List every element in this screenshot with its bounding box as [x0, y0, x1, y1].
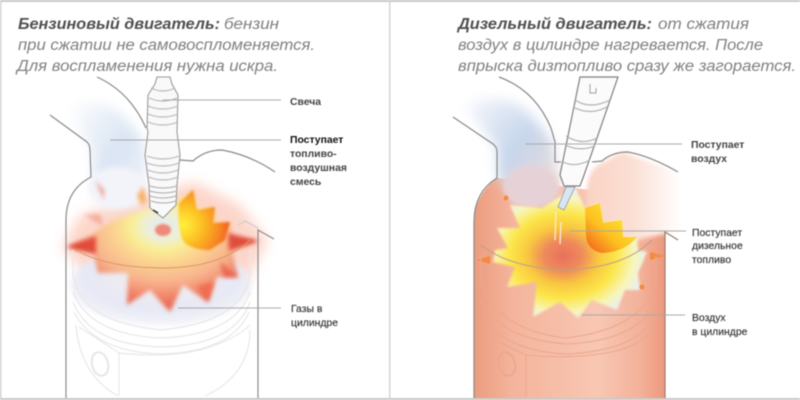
heading: diesel engine description: воздух в цилиндре нагревается. После [458, 37, 763, 54]
outer flame glow [62, 182, 268, 316]
heading: petrol engine description [15, 16, 315, 75]
callout: cylinder gases [178, 304, 338, 329]
callout: cylinder air: в цилиндре [692, 327, 748, 338]
cylinder body [474, 178, 665, 398]
red flame tips [66, 180, 259, 302]
callout: cylinder air: Воздух [692, 313, 726, 324]
callout: spark plug: Свеча [290, 97, 321, 108]
callout: fuel-air mixture: воздушная [290, 163, 347, 174]
callout: diesel fuel: Поступает [692, 228, 742, 239]
callout: fuel-air mixture [110, 135, 347, 188]
diagram: petrol cylinder [50, 77, 275, 398]
heading: petrol engine description: при сжатии не самовоспломеняется. [18, 37, 315, 54]
callout: air intake: воздух [691, 154, 727, 165]
flame orange patch [137, 186, 147, 206]
spark plug [145, 77, 180, 218]
callout: cylinder gases: Газы в [291, 304, 323, 315]
callout: cylinder gases: цилиндре [291, 318, 338, 329]
flame yellow lobe [179, 190, 230, 250]
intake valve [88, 167, 146, 209]
orange flame tips [477, 196, 664, 290]
panel: petrol engine [15, 16, 347, 398]
callout: air intake: Поступает [691, 140, 744, 151]
piston outline [73, 250, 250, 396]
combustion chamber rim [481, 240, 652, 270]
callout: diesel fuel [570, 228, 743, 266]
spark [155, 224, 171, 236]
combustion chamber rim [72, 240, 250, 268]
intake air flow [465, 99, 562, 200]
callout: air intake [525, 140, 744, 165]
callout: cylinder air [582, 313, 748, 338]
callout: diesel fuel: дизельное [692, 241, 743, 252]
heading: diesel engine description [456, 16, 796, 75]
intake air flow [70, 102, 146, 205]
heading: petrol engine description: Для воспламенения нужна искра. [15, 58, 278, 75]
diagram: diesel cylinder [453, 77, 682, 398]
piston outline [481, 255, 656, 396]
combustion chamber lobe [587, 152, 682, 250]
flame yellow lobe [585, 203, 637, 253]
fuel injector [555, 77, 618, 244]
piston top [71, 245, 251, 325]
heading: diesel engine description: от сжатия [658, 16, 749, 33]
cylinder walls [50, 77, 275, 398]
panel: diesel engine [453, 16, 796, 398]
cylinder walls [453, 77, 678, 398]
flame star [68, 190, 257, 312]
heading: diesel engine description: впрыска дизтопливо сразу же загорается. [458, 58, 796, 75]
intake valve [503, 166, 559, 208]
callout: fuel-air mixture: смесь [290, 177, 321, 188]
heading: diesel engine description: Дизельный двигатель: [456, 16, 652, 33]
callout: diesel fuel: топливо [692, 255, 731, 266]
callout: fuel-air mixture: Поступает [290, 135, 343, 146]
heading: petrol engine description: бензин [224, 16, 280, 33]
callout: fuel-air mixture: топливо- [290, 149, 337, 160]
flame star [493, 187, 647, 318]
heading: petrol engine description: Бензиновый двигатель: [18, 16, 220, 33]
